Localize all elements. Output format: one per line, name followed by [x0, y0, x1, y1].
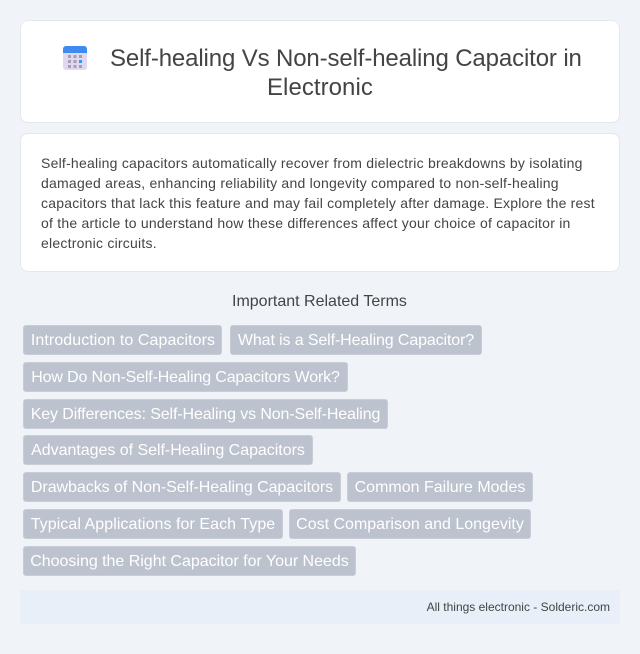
intro paragraph: of the article to understand how these differences affect your choice of capacitor in: [41, 215, 571, 231]
tag: what is: What is a Self-Healing Capacitor?: [238, 332, 474, 349]
title line 2: Electronic: [267, 74, 373, 101]
tag: key differences: [23, 399, 388, 429]
tag: key differences: Key Differences: Self-Healing vs Non-Self-Healing: [31, 406, 380, 423]
icon: calendar grid: [63, 46, 87, 70]
intro paragraph: [41, 155, 595, 251]
header panel: [20, 20, 620, 123]
tag: drawbacks: [23, 472, 341, 502]
tag: applications: Typical Applications for Each Type: [31, 516, 275, 533]
intro paragraph: electronic circuits.: [41, 235, 157, 251]
intro paragraph: damaged areas, enhancing reliability and longevity compared to non-self-healing: [41, 175, 559, 191]
footer text: All things electronic - Solderic.com: [427, 600, 610, 614]
tag: failure modes: [347, 472, 533, 502]
tag: applications: [23, 509, 283, 539]
tag: choosing: Choosing the Right Capacitor for Your Needs: [30, 553, 349, 570]
intro paragraph: Self-healing capacitors automatically recover from dielectric breakdowns by isolating: [41, 155, 583, 171]
tag: what is: [230, 325, 482, 355]
tag: introduction: Introduction to Capacitors: [31, 332, 215, 349]
tag: how do: [23, 362, 348, 392]
intro panel: [20, 133, 620, 272]
tag: how do: How Do Non-Self-Healing Capacitors Work?: [31, 369, 340, 386]
title line 1: Self-healing Vs Non-self-healing Capacitor in: [110, 45, 582, 72]
tag: advantages: [23, 435, 313, 465]
tag: cost: [289, 509, 531, 539]
section heading: Important Related Terms: [232, 293, 407, 310]
tag: advantages: Advantages of Self-Healing Capacitors: [31, 442, 305, 459]
tag: introduction: [23, 325, 222, 355]
tag: drawbacks: Drawbacks of Non-Self-Healing Capacitors: [31, 479, 333, 496]
intro paragraph: capacitors that lack this feature and may fail completely after damage. Explore the rest: [41, 195, 595, 211]
tag: cost: Cost Comparison and Longevity: [296, 516, 524, 533]
footer bar: [20, 590, 620, 624]
tag: failure modes: Common Failure Modes: [355, 479, 525, 496]
tag: choosing: [23, 546, 356, 576]
